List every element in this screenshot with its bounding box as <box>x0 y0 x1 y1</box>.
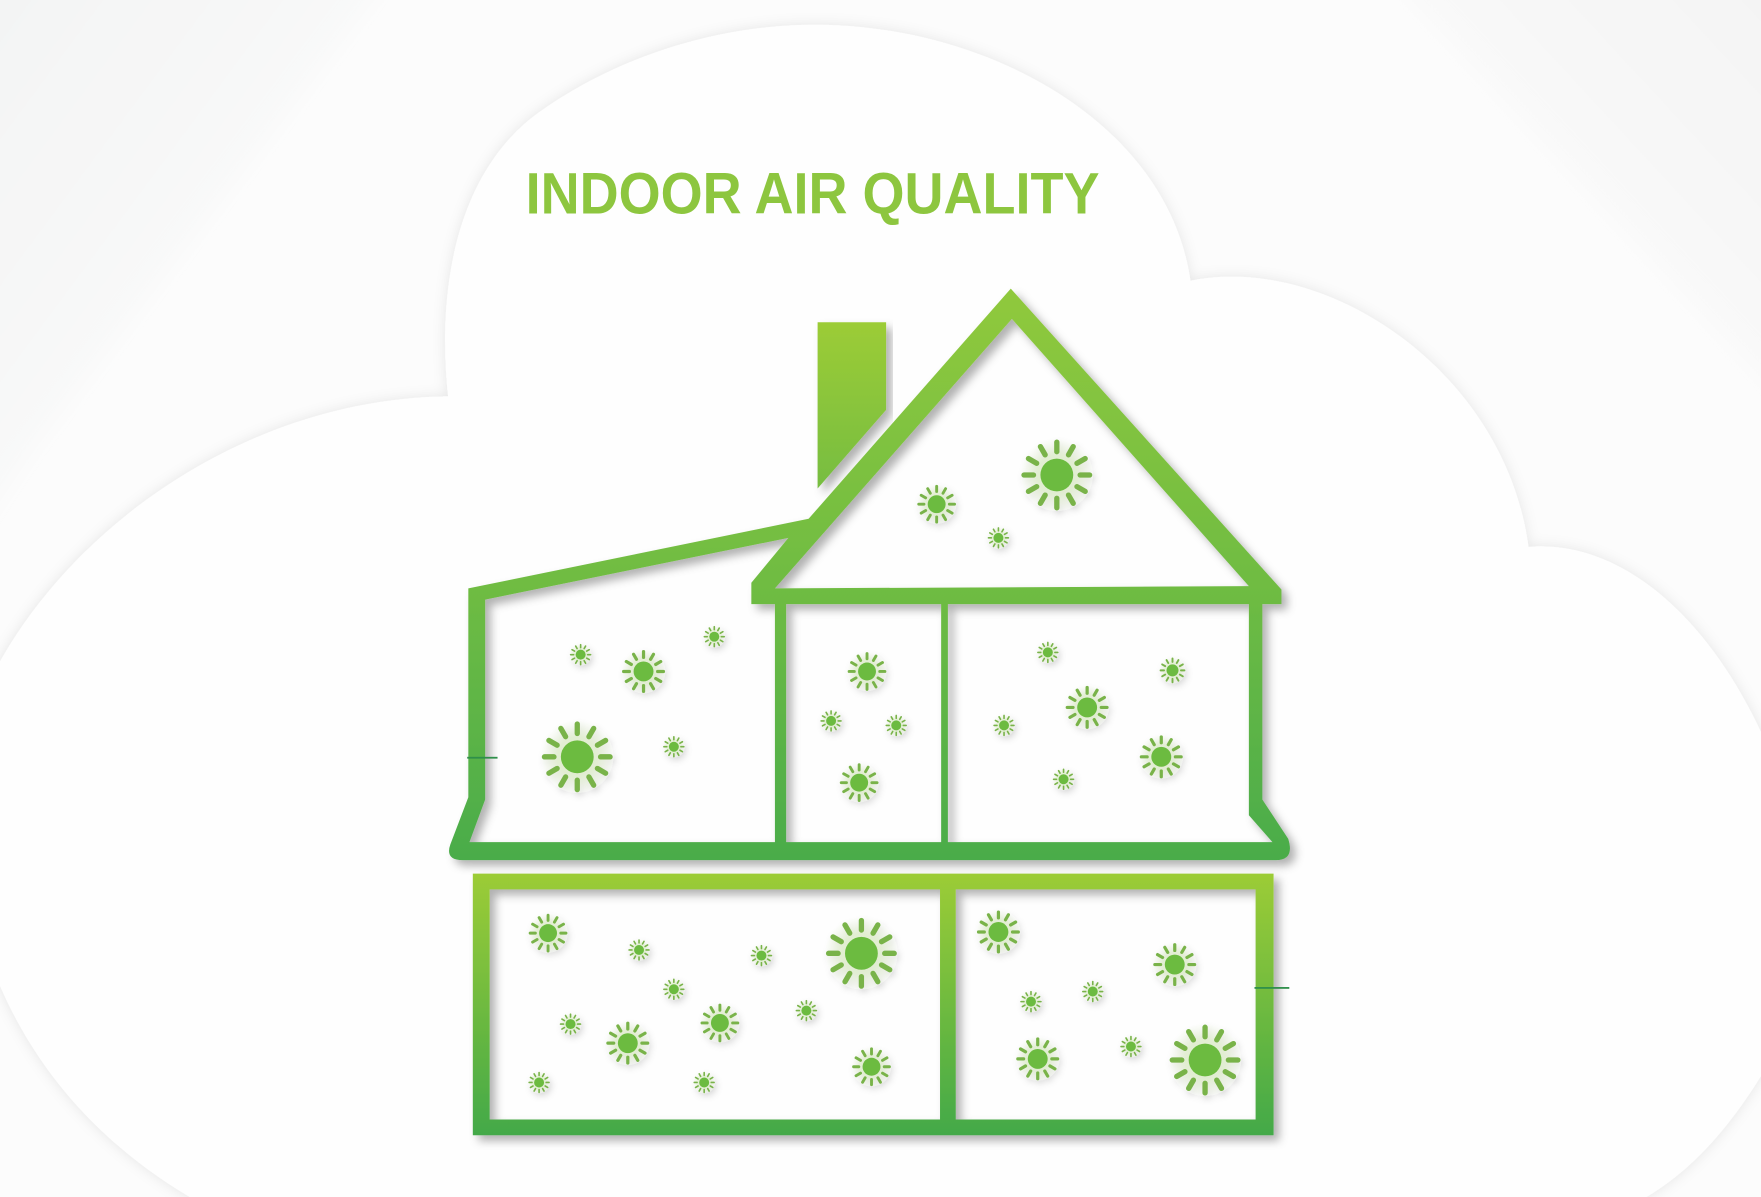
icon: germ <box>693 1072 715 1093</box>
upper floor outline <box>449 289 1290 860</box>
icon: germ <box>1020 991 1042 1013</box>
icon: germ <box>1120 1036 1142 1057</box>
icon: germ <box>541 721 613 793</box>
icon: germ <box>1037 641 1059 663</box>
icon: germ <box>993 714 1015 736</box>
icon: germ <box>988 527 1009 549</box>
icon: germ <box>977 910 1020 954</box>
icon: germ <box>628 939 650 961</box>
icon: germ <box>840 763 879 802</box>
icon: germ <box>825 917 897 989</box>
icon: germ <box>1053 768 1074 790</box>
icon: germ <box>1139 735 1183 779</box>
icon: germ <box>1159 657 1186 683</box>
icon: germ <box>528 913 568 953</box>
house illustration <box>449 289 1290 1135</box>
basement outline <box>473 874 1274 1135</box>
germs: attic <box>917 439 1093 549</box>
icon: germ <box>560 1013 581 1035</box>
icon: germ <box>622 650 665 693</box>
icon: germ <box>751 945 772 966</box>
icon: germ <box>820 710 842 732</box>
icon: germ <box>1021 439 1093 511</box>
icon: chimney <box>818 322 886 488</box>
icon: germ <box>606 1021 650 1065</box>
tick mark right <box>1254 987 1289 989</box>
icon: germ <box>847 652 887 691</box>
icon: germ <box>663 978 685 1000</box>
icon: germ <box>917 485 956 524</box>
tick mark left <box>467 757 498 759</box>
icon: germ <box>703 626 725 648</box>
icon: germ <box>700 1003 740 1043</box>
icon: germ <box>528 1072 550 1093</box>
icon: germ <box>1016 1037 1060 1081</box>
icon: germ <box>570 644 592 666</box>
icon: germ <box>1153 943 1197 986</box>
title: INDOOR AIR QUALITY <box>526 161 1100 226</box>
germs: basement left <box>528 913 897 1093</box>
icon: germ <box>1082 981 1104 1002</box>
germs: right room <box>993 641 1186 790</box>
icon: germ <box>885 714 907 736</box>
germs: left room <box>541 626 725 793</box>
germs: middle room <box>820 652 907 802</box>
icon: germ <box>795 1000 817 1022</box>
icon: germ <box>852 1047 891 1086</box>
icon: germ <box>1169 1024 1241 1096</box>
icon: germ <box>1065 686 1109 729</box>
icon: germ <box>663 736 685 758</box>
germs: basement right <box>977 910 1241 1096</box>
